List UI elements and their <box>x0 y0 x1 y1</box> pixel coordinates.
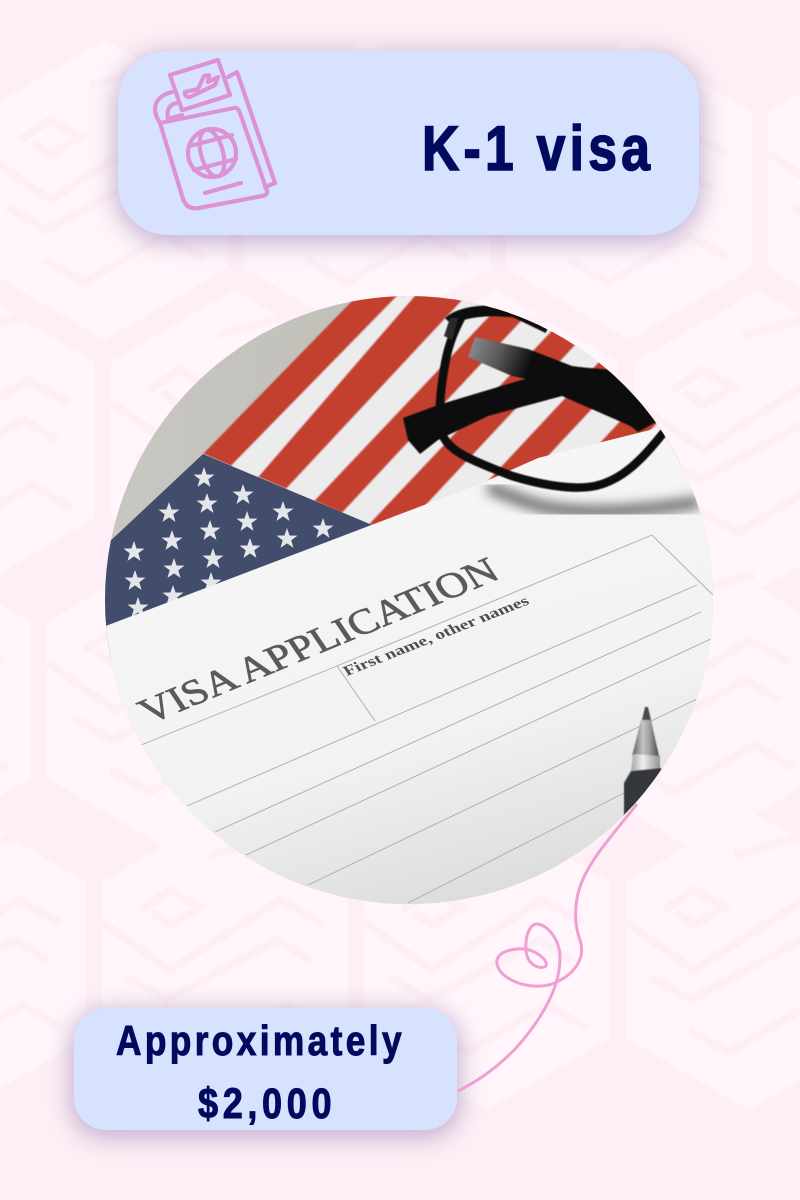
title text: K-1 visa <box>422 114 651 184</box>
eyeglasses <box>403 311 664 488</box>
stone surface <box>100 290 720 910</box>
form heading text: VISA APPLICATION <box>131 550 507 732</box>
price text line 1: Approximately <box>116 1018 402 1065</box>
form field label: First name, other names <box>340 594 533 679</box>
icon: passport with ticket <box>155 60 275 208</box>
pen <box>623 706 662 816</box>
flag stripes <box>202 296 713 672</box>
flag canton with stars <box>105 454 372 659</box>
form lines <box>141 535 713 903</box>
photo: visa application form on US flag <box>105 296 713 904</box>
panel: price callout <box>74 1008 457 1130</box>
panel: title banner <box>118 51 699 235</box>
price text line 2: $2,000 <box>198 1080 332 1128</box>
paper sheet <box>90 428 725 920</box>
glasses shadow <box>488 487 700 512</box>
